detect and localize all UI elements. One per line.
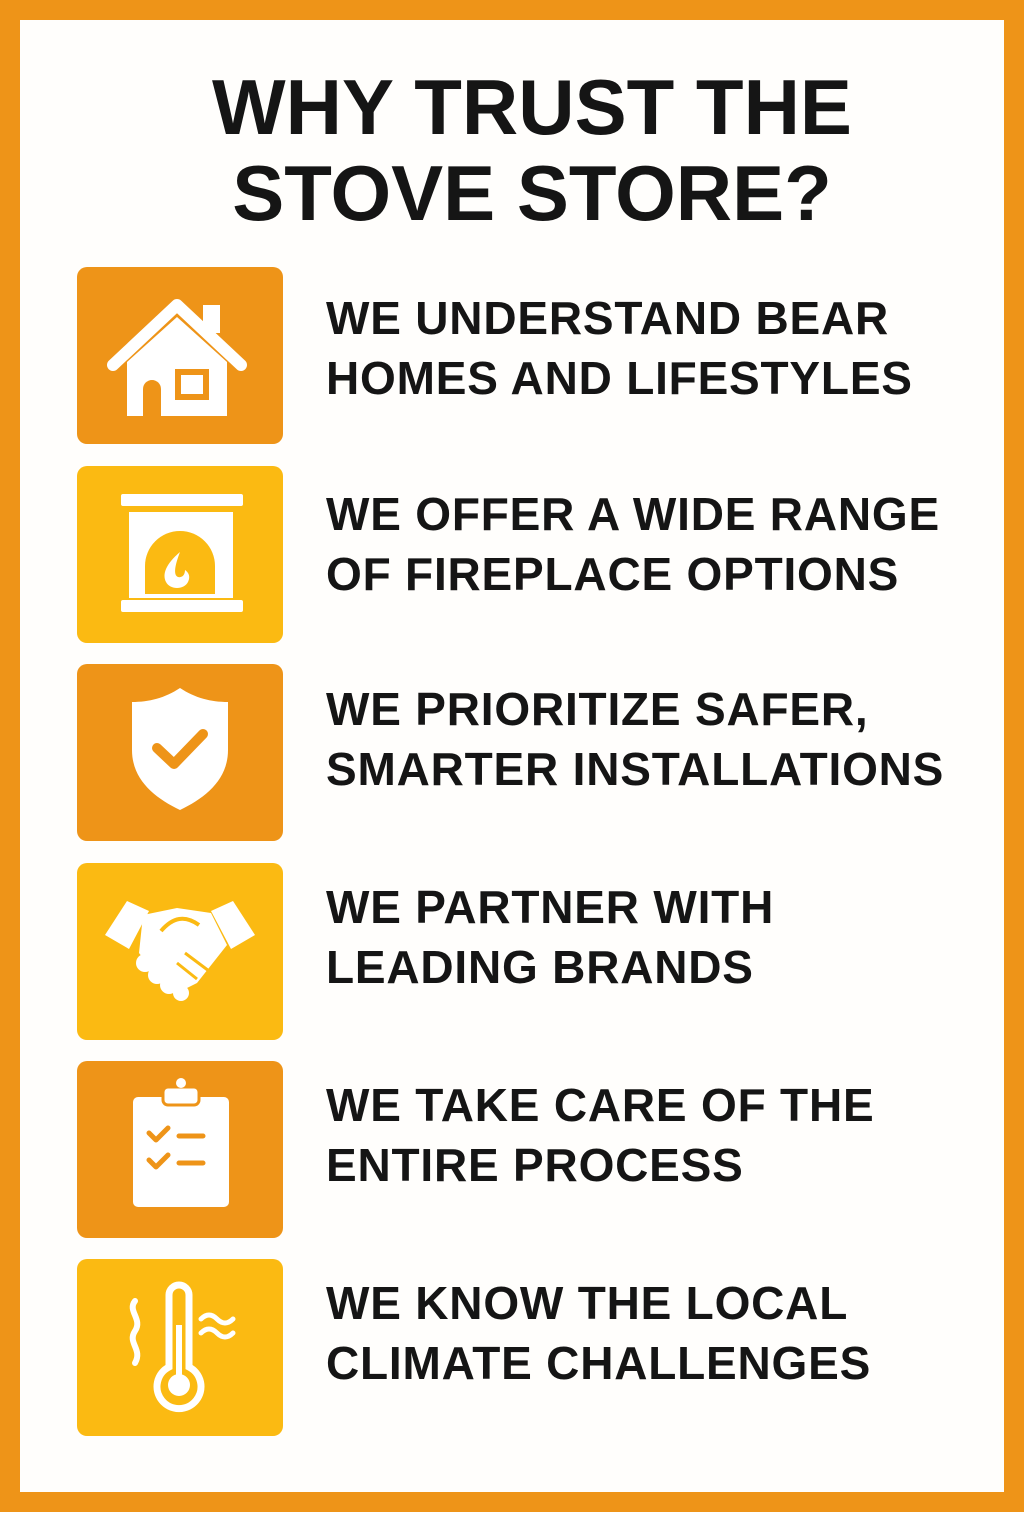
text 5: [326, 1079, 874, 1191]
title: [212, 63, 852, 237]
icon: handshake: [77, 863, 283, 1040]
text 4: [326, 881, 774, 993]
text 6: WE KNOW THE LOCAL: [326, 1277, 848, 1329]
text 4: LEADING BRANDS: [326, 941, 754, 993]
icon: house: [77, 267, 283, 444]
text 3: [326, 683, 944, 795]
text 3: SMARTER INSTALLATIONS: [326, 743, 944, 795]
text 3: WE PRIORITIZE SAFER,: [326, 683, 868, 735]
icon: clipboard: [77, 1061, 283, 1238]
icon: thermometer: [77, 1259, 283, 1436]
text 1: WE UNDERSTAND BEAR: [326, 292, 889, 344]
text 2: OF FIREPLACE OPTIONS: [326, 548, 899, 600]
icon: shield: [77, 664, 283, 841]
text 2: [326, 488, 940, 600]
icon: fireplace: [77, 466, 283, 643]
text 6: CLIMATE CHALLENGES: [326, 1337, 871, 1389]
text 2: WE OFFER A WIDE RANGE: [326, 488, 940, 540]
text 5: ENTIRE PROCESS: [326, 1139, 744, 1191]
text 5: WE TAKE CARE OF THE: [326, 1079, 874, 1131]
text 1: HOMES AND LIFESTYLES: [326, 352, 913, 404]
text 4: WE PARTNER WITH: [326, 881, 774, 933]
title: WHY TRUST THE: [212, 63, 852, 151]
title: STOVE STORE?: [232, 149, 832, 237]
text 6: [326, 1277, 871, 1389]
text 1: [326, 292, 913, 404]
